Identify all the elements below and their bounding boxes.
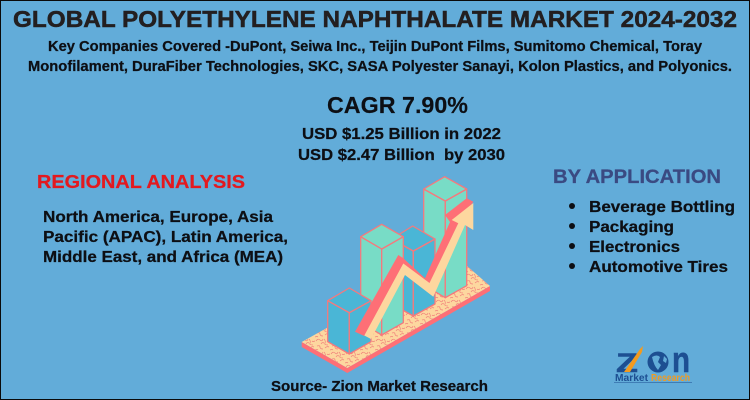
bar 1: short blue [328, 288, 371, 354]
by application heading: BY APPLICATION [553, 167, 721, 188]
logo: Zion Market Research: Z [616, 348, 638, 378]
application list: Automotive Tires [589, 259, 728, 276]
regions list [43, 209, 288, 266]
bar 2: medium green [361, 224, 403, 335]
CAGR figure: CAGR 7.90% [327, 92, 468, 118]
logo: Zion Market Research: n [672, 339, 690, 380]
panel: regional analysis [37, 172, 288, 266]
regions list: North America, Europe, Asia [43, 209, 273, 226]
market size values: USD $2.47 Billion by 2030 [298, 147, 505, 164]
bar 4: tall green [424, 177, 467, 298]
title: GLOBAL POLYETHYLENE NAPHTHALATE MARKET 2024-2032 [13, 6, 737, 32]
application list: Packaging [589, 219, 674, 236]
key companies text [28, 39, 732, 75]
logo: Zion Market Research: Research [651, 373, 690, 384]
platform [302, 262, 490, 373]
key companies text: Key Companies Covered -DuPont, Seiwa Inc., Teijin DuPont Films, Sumitomo Chemical, Toray [48, 39, 702, 55]
regional analysis heading: REGIONAL ANALYSIS [37, 172, 245, 192]
panel: by application [553, 167, 735, 276]
source line: Source- Zion Market Research [271, 379, 488, 395]
chart illustration: isometric bars with rising arrow [302, 177, 490, 373]
market size values: USD $1.25 Billion in 2022 [302, 126, 501, 143]
application list [569, 199, 735, 276]
application list: Beverage Bottling [589, 199, 735, 216]
market size values [298, 126, 505, 164]
bar 3: medium blue [392, 226, 435, 316]
application list: Electronics [589, 239, 680, 256]
regions list: Middle East, and Africa (MEA) [43, 249, 283, 266]
key companies text: Monofilament, DuraFiber Technologies, SKC, SASA Polyester Sanayi, Kolon Plastics, and Polyonics. [28, 59, 732, 75]
logo: Zion Market Research [614, 339, 692, 384]
rising arrow [355, 198, 473, 339]
logo: Zion Market Research: Market [615, 373, 649, 384]
regions list: Pacific (APAC), Latin America, [43, 229, 288, 246]
